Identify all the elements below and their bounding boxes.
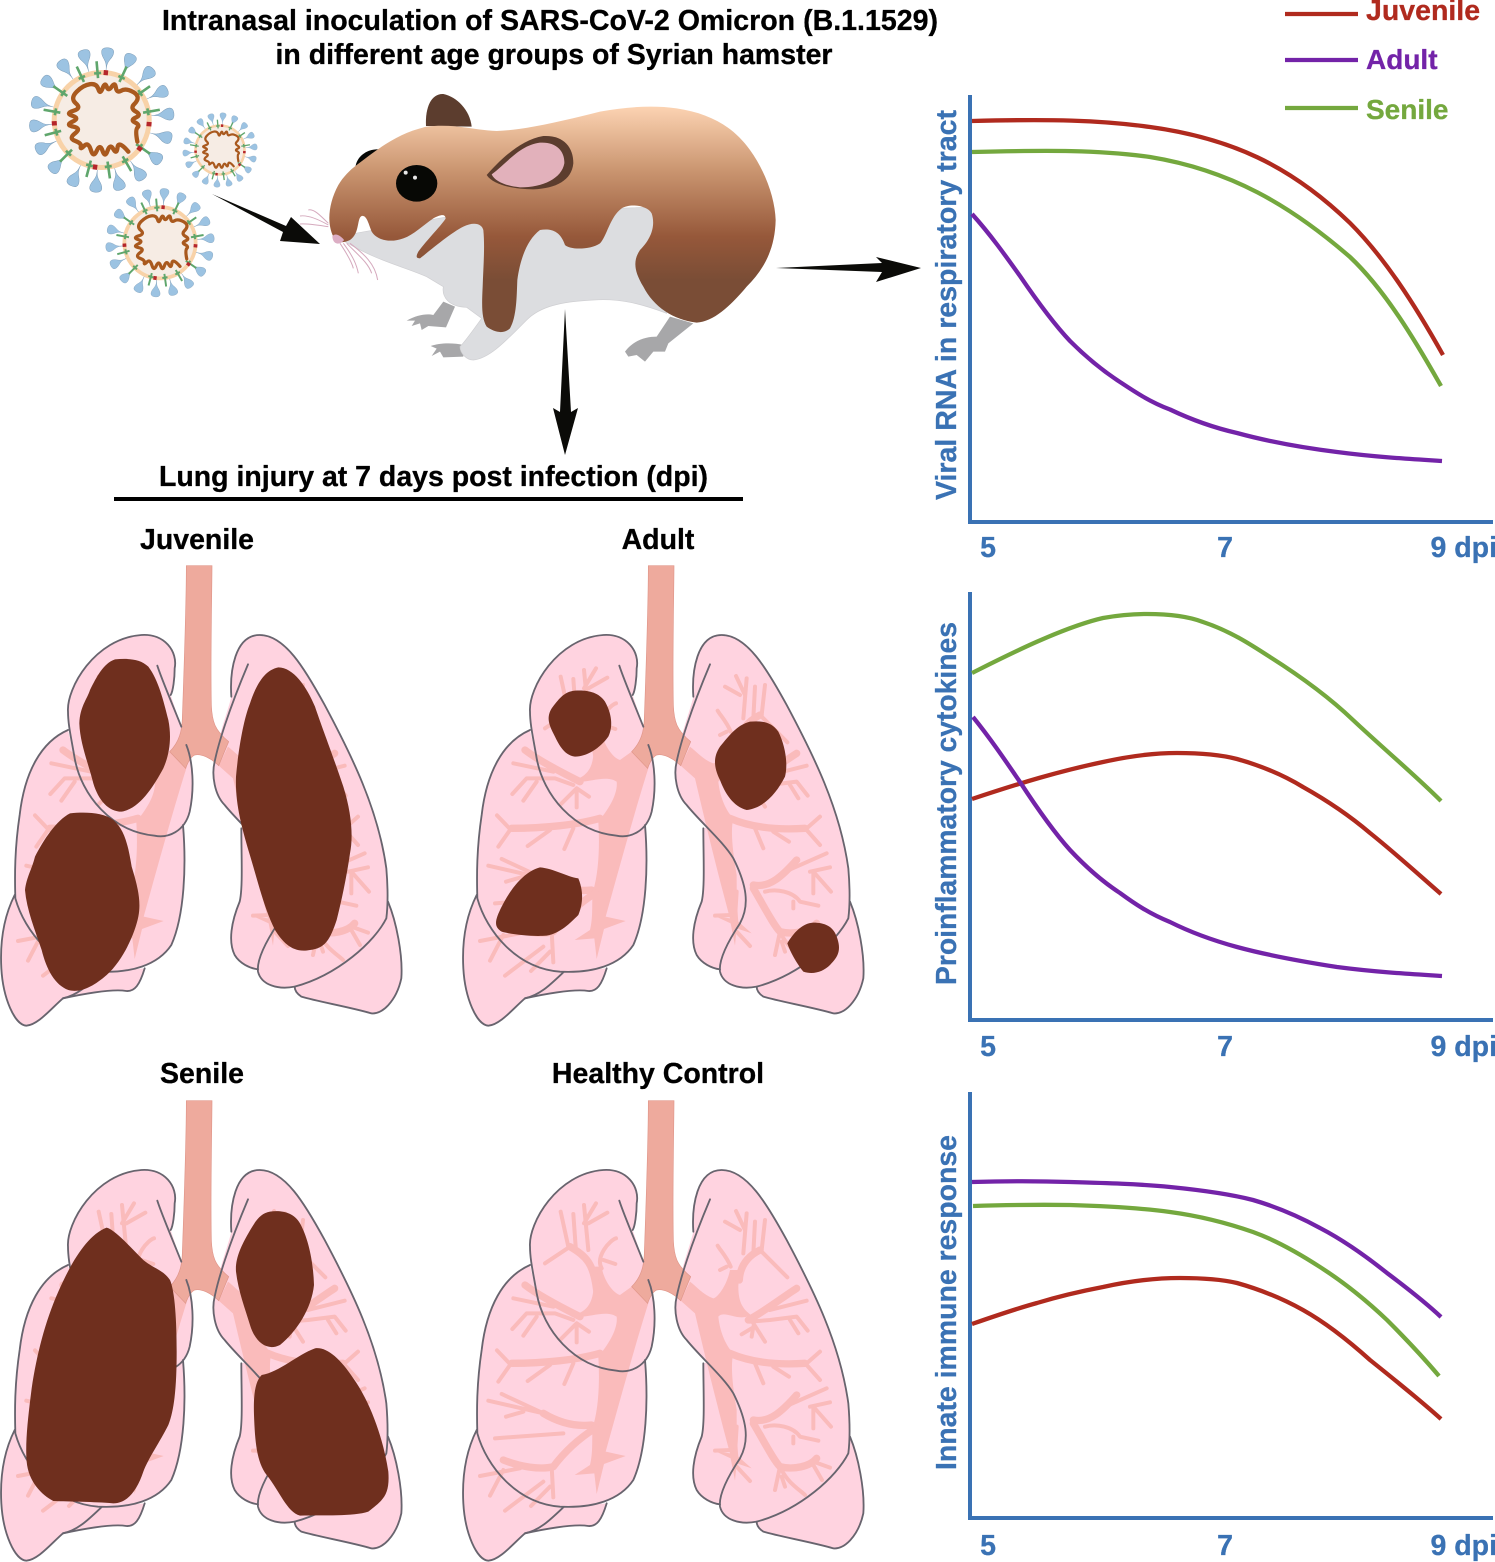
hamster brown fur	[329, 107, 776, 332]
injury patches	[496, 691, 839, 973]
hamster far legs	[407, 302, 693, 362]
title: in different age groups of Syrian hamster	[276, 39, 832, 71]
hamster white underside	[337, 207, 667, 360]
x axis labels: 7	[1217, 1031, 1233, 1063]
chart: innate immune response	[931, 1092, 1495, 1562]
panel: adult lungs	[463, 524, 864, 1026]
chart: proinflammatory cytokines	[931, 592, 1495, 1063]
label: healthy control: Healthy Control	[552, 1058, 764, 1090]
x axis labels: 5	[980, 1530, 996, 1562]
x axis labels	[980, 532, 1495, 564]
label: senile: Senile	[160, 1058, 244, 1090]
hamster whiskers	[300, 210, 378, 280]
curve: adult	[972, 1181, 1441, 1317]
x axis labels: 7	[1217, 532, 1233, 564]
legend: senile: Senile	[1366, 94, 1448, 125]
hamster far eye	[355, 149, 381, 167]
x axis labels: 7	[1217, 1530, 1233, 1562]
curve: juvenile	[972, 1278, 1441, 1419]
label: juvenile: Juvenile	[140, 524, 254, 556]
lung illustration	[463, 1101, 864, 1561]
curve: senile	[973, 1205, 1439, 1376]
lung illustration	[1, 566, 402, 1026]
x axis labels	[980, 1031, 1495, 1063]
panel: healthy control lungs	[463, 1058, 864, 1561]
icon: virus large	[29, 47, 174, 193]
arrow: hamster to viral RNA chart	[776, 257, 921, 282]
x axis labels: 5	[980, 532, 996, 564]
lung illustration	[463, 566, 864, 1026]
legend: adult: Adult	[1366, 44, 1438, 75]
panel: juvenile lungs	[1, 524, 402, 1026]
injury patches	[26, 1211, 389, 1516]
lung illustration	[1, 1101, 402, 1561]
title: Intranasal inoculation of SARS-CoV-2 Omicron (B.1.1529)	[162, 5, 938, 37]
heading: lung injury: Lung injury at 7 days post infection (dpi)	[159, 461, 708, 493]
hamster far ear	[426, 94, 472, 127]
hamster eye	[396, 165, 437, 202]
curve: juvenile	[972, 120, 1443, 355]
title	[162, 5, 938, 71]
chart: viral RNA in respiratory tract	[931, 95, 1495, 564]
curve: adult	[973, 717, 1442, 976]
hamster nose	[332, 235, 344, 244]
legend	[1285, 0, 1480, 125]
hamster ear	[487, 136, 573, 189]
injury patches	[25, 659, 352, 991]
icon: virus medium	[105, 188, 215, 297]
curve: adult	[972, 214, 1442, 461]
curve: senile	[972, 614, 1441, 801]
arrow: hamster to lung injury	[553, 309, 578, 455]
y axis label: Innate immune response	[931, 1135, 963, 1470]
axes	[970, 95, 1493, 522]
axes	[970, 592, 1493, 1020]
arrow: virus to nose	[212, 194, 320, 244]
curve: juvenile	[972, 753, 1441, 894]
y axis label: Viral RNA in respiratory tract	[931, 109, 963, 500]
icon: hamster	[300, 94, 776, 362]
x axis labels: 5	[980, 1031, 996, 1063]
axes	[970, 1092, 1493, 1518]
label: adult: Adult	[622, 524, 695, 556]
curve: senile	[972, 151, 1441, 386]
x axis labels	[980, 1530, 1495, 1562]
panel: senile lungs	[1, 1058, 402, 1561]
icon: virus small	[183, 113, 257, 187]
y axis label: Proinflammatory cytokines	[931, 622, 963, 985]
